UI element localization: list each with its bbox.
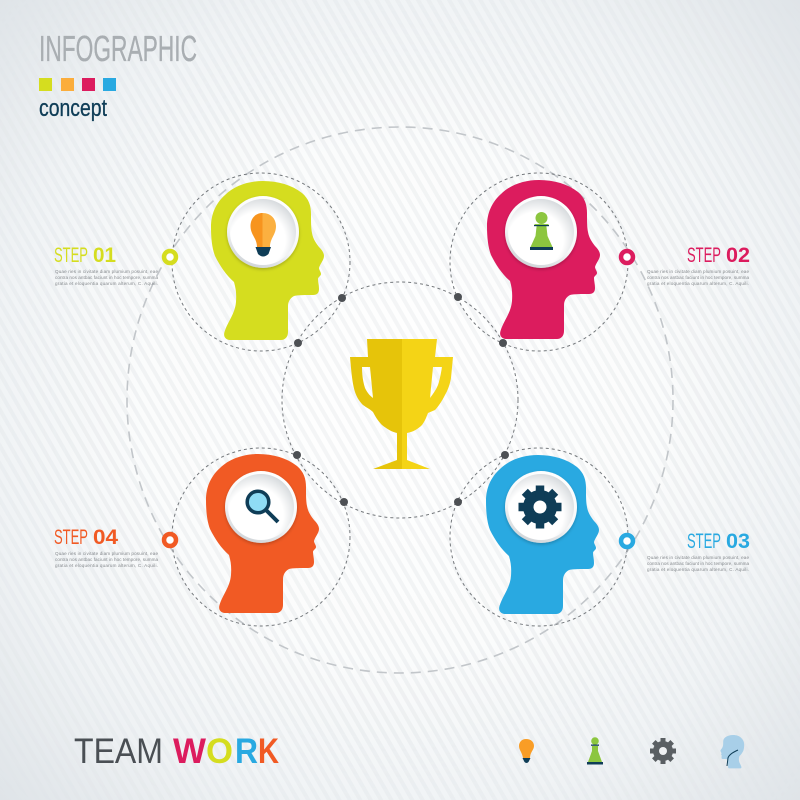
central dashed circle — [282, 282, 518, 518]
text block: step 3 — [647, 530, 750, 572]
footer icon: gear — [650, 738, 676, 764]
icon: magnifying glass — [247, 491, 278, 522]
description: gratia et eloquentia quarum alterum, C. Aquili. — [647, 281, 749, 286]
description: contra nos antbac faciunt in hoc tempore, summa — [647, 275, 749, 280]
description: contra nos antbac faciunt in hoc tempore, summa — [647, 561, 749, 566]
description: Quae ries in civitate diam plumium posuint, eae — [55, 269, 158, 274]
footer heading: team work: TEAM — [74, 732, 163, 771]
description: gratia et eloquentia quarum alterum, C. Aquili. — [647, 567, 749, 572]
footer heading: team work: K — [258, 732, 279, 771]
marker ring: step 2 — [621, 251, 633, 263]
dashed circle: step 4 — [172, 448, 350, 626]
panel: step 2 head — [487, 180, 600, 339]
step label: STEP — [687, 244, 721, 267]
icon disc — [505, 471, 577, 543]
description — [647, 555, 749, 572]
text block: step 1 — [54, 244, 158, 286]
background stripes — [48, 48, 752, 752]
panel: step 1 head — [211, 181, 324, 340]
footer heading: team work — [74, 732, 279, 771]
step label: STEP — [687, 530, 721, 553]
colour swatches — [39, 78, 116, 91]
description — [55, 551, 158, 568]
description: Quae ries in civitate diam plumium posuint, eae — [55, 551, 158, 556]
connector dots — [293, 293, 509, 506]
icon: trophy — [350, 339, 453, 469]
step label: STEP — [54, 526, 88, 549]
text block: step 1: 01 — [93, 244, 116, 267]
description — [647, 269, 749, 286]
text block: step 2 — [647, 244, 750, 286]
footer icon: light bulb — [519, 739, 534, 763]
description: Quae ries in civitate diam plumium posuint, eae — [647, 269, 749, 274]
head silhouette — [206, 454, 319, 613]
description: contra nos antbac faciunt in hoc tempore, summa — [55, 275, 158, 280]
head silhouette — [211, 181, 324, 340]
step label: STEP — [54, 244, 88, 267]
text block: step 3: 03 — [726, 530, 750, 553]
dashed circle: step 2 — [450, 173, 628, 351]
icon disc — [227, 196, 299, 268]
dashed circle: step 1 — [172, 173, 350, 351]
text block: step 2: 02 — [726, 244, 750, 267]
dashed circle: step 3 — [450, 448, 628, 626]
marker ring: step 1 — [164, 251, 176, 263]
footer heading: team work: R — [235, 732, 258, 771]
description: gratia et eloquentia quarum alterum, C. Aquili. — [55, 281, 158, 286]
head silhouette — [487, 180, 600, 339]
title: INFOGRAPHIC — [39, 28, 197, 69]
description: contra nos antbac faciunt in hoc tempore, summa — [55, 557, 158, 562]
footer icon: chess pawn — [587, 737, 603, 764]
icon disc — [505, 196, 577, 268]
icon: chess pawn — [530, 212, 553, 250]
panel: step 3 head — [486, 455, 599, 614]
head silhouette — [486, 455, 599, 614]
subtitle: concept — [39, 95, 107, 122]
description: gratia et eloquentia quarum alterum, C. Aquili. — [55, 563, 158, 568]
icon: gear — [518, 486, 562, 528]
icon disc — [225, 471, 297, 543]
text block: step 4 — [54, 526, 158, 568]
description: Quae ries in civitate diam plumium posuint, eae — [647, 555, 749, 560]
large outer dashed circle — [127, 127, 673, 673]
icon: light bulb — [250, 213, 276, 256]
panel: step 4 head — [206, 454, 319, 613]
text block: step 4: 04 — [93, 526, 118, 549]
footer icon: head — [720, 735, 744, 768]
marker ring: step 3 — [621, 535, 633, 547]
footer heading: team work: W — [173, 732, 206, 771]
footer heading: team work: O — [206, 732, 233, 771]
marker ring: step 4 — [164, 534, 176, 546]
description — [55, 269, 158, 286]
